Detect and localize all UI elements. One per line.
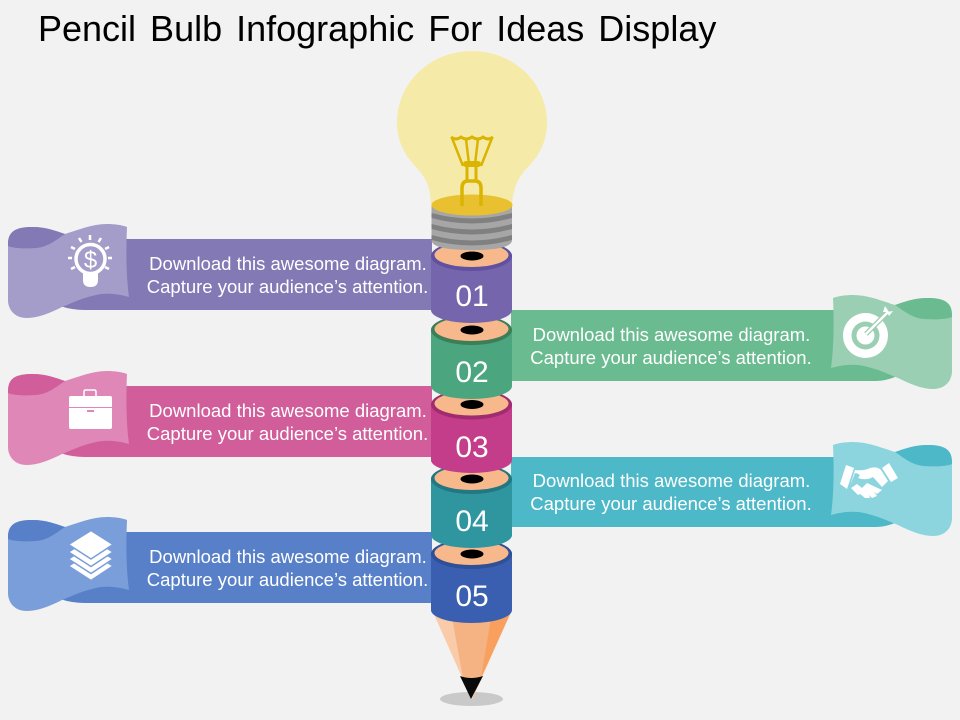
icon: briefcase [69, 390, 112, 429]
pencil segment 01 [431, 241, 512, 323]
panel: banner 4 teal [511, 442, 952, 536]
pencil segment 04: 04 [455, 505, 489, 538]
pencil segment 05 [431, 539, 512, 623]
screw base [432, 206, 512, 250]
pencil segment 05: 05 [455, 580, 489, 613]
banner 1 text: Capture your audience’s attention. [147, 276, 428, 297]
banner 3 text: Capture your audience’s attention. [147, 423, 428, 444]
icon: target with arrow [843, 306, 893, 358]
filament [451, 137, 493, 206]
banner 3 text: Download this awesome diagram. [149, 400, 427, 421]
pencil segment 03 [431, 390, 512, 473]
banner 1 text [147, 253, 428, 297]
pencil segment 03: 03 [455, 431, 489, 464]
icon: dollar bulb [68, 235, 112, 287]
panel: banner 3 pink [8, 371, 432, 465]
banner 2 text: Capture your audience’s attention. [530, 347, 812, 368]
light bulb [397, 51, 547, 250]
pencil tip [433, 612, 511, 700]
title: Pencil Bulb Infographic For Ideas Display [38, 8, 716, 49]
pencil segment 02: 02 [455, 356, 489, 389]
banner 5 text: Download this awesome diagram. [149, 546, 427, 567]
panel: banner 5 blue [8, 517, 432, 611]
banner 4 text: Download this awesome diagram. [533, 470, 810, 491]
banner 3 text [147, 400, 428, 444]
banner 4 text [530, 470, 812, 514]
gold cap [432, 194, 512, 216]
pencil segment 04 [431, 464, 512, 548]
bulb glass [397, 51, 547, 206]
icon: dollar bulb: $ [84, 247, 97, 274]
banner 4 text: Capture your audience’s attention. [530, 493, 812, 514]
banner 5 text: Capture your audience’s attention. [147, 569, 428, 590]
icon: layers [68, 530, 113, 580]
banner 2 text [530, 324, 812, 368]
pencil segment 01: 01 [455, 280, 489, 313]
shadow under pencil [440, 692, 503, 706]
banner 1 text: Download this awesome diagram. [149, 253, 427, 274]
icon: handshake [840, 463, 898, 498]
banner 5 text [147, 546, 428, 590]
pencil segment 02 [431, 315, 512, 399]
banner 2 text: Download this awesome diagram. [533, 324, 810, 345]
panel: banner 1 purple [8, 224, 432, 318]
panel: banner 2 green [511, 295, 952, 389]
